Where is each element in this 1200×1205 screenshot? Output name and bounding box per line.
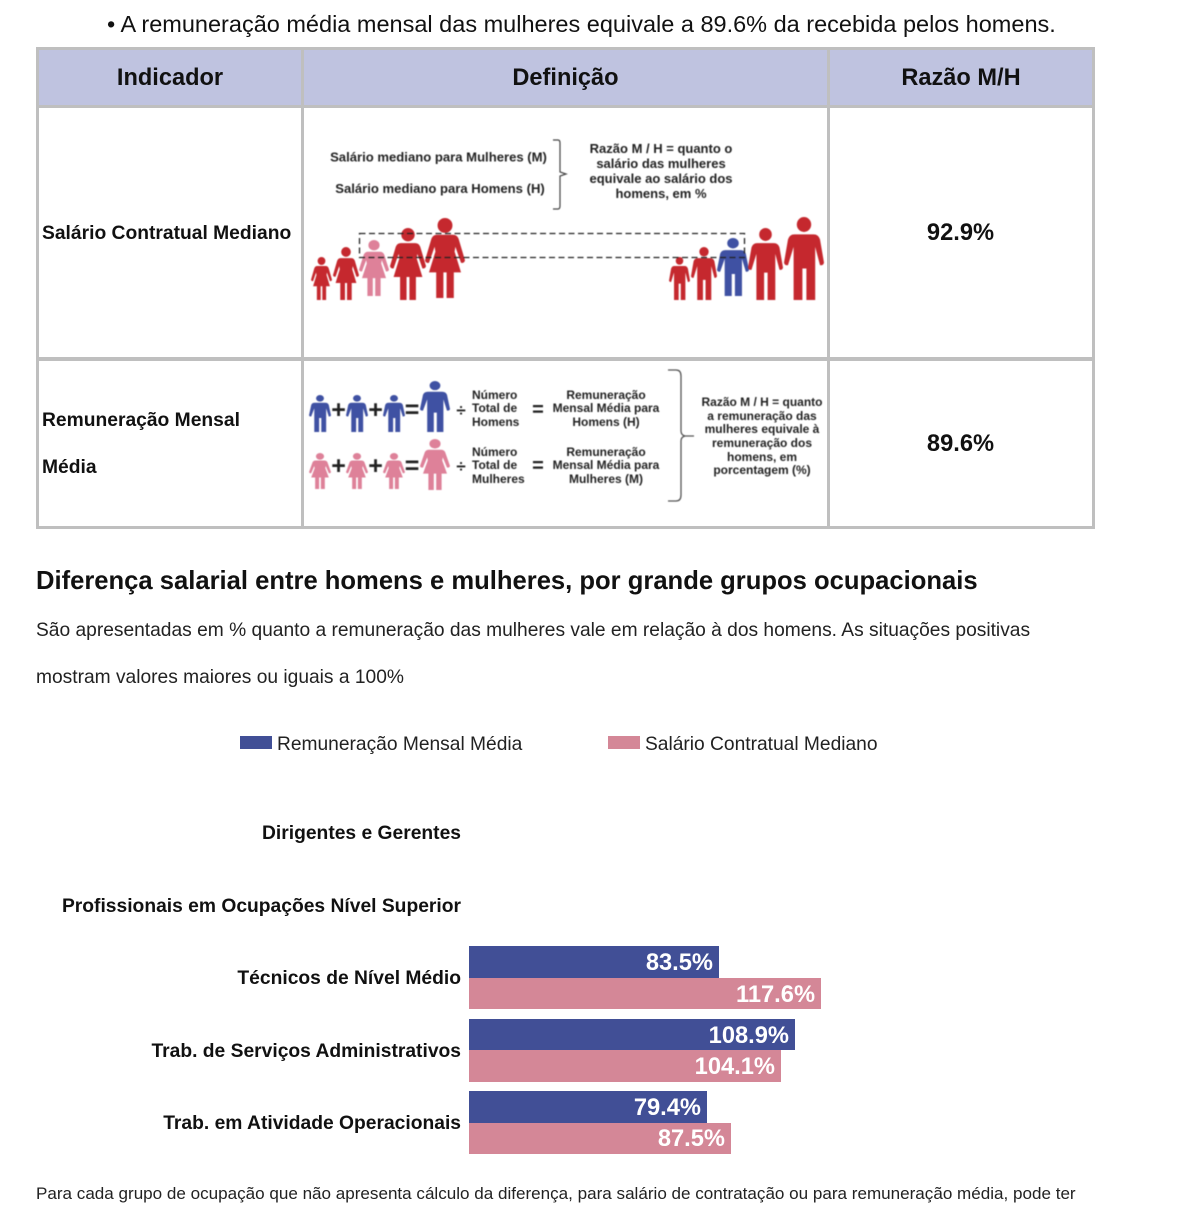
legend: remuneração mensal média: Remuneração Mensal Média xyxy=(277,734,522,755)
dashed comparison box xyxy=(360,234,744,258)
brace: remuneração xyxy=(668,370,694,501)
icon group: men sum xyxy=(309,381,450,432)
category: Operacionais: Trab. em Atividade Operacionais xyxy=(163,1113,461,1134)
icon group: five women xyxy=(311,218,465,300)
bar: administrativos remuneração: 108.9% xyxy=(709,1023,789,1049)
bar: administrativos remuneração xyxy=(469,1019,795,1050)
text: razão remuneração explanation: homens, em xyxy=(727,450,797,464)
row label: Salário Contratual Mediano xyxy=(39,108,301,357)
operators: men row xyxy=(331,396,544,424)
bar: técnicos remuneração xyxy=(469,946,719,978)
table header: Razão M/H xyxy=(830,50,1092,105)
category: Profissionais: Profissionais em Ocupações Nível Superior xyxy=(62,896,461,917)
operators: men row: + xyxy=(368,396,383,424)
text: razão remuneração explanation: porcentagem (%) xyxy=(713,463,811,477)
operators: women row: + xyxy=(368,452,383,480)
text: remuneração mulheres: Mensal Média para xyxy=(553,458,660,472)
text: razão salário explanation: homens, em % xyxy=(615,186,707,201)
text: razão remuneração explanation: mulheres equivale à xyxy=(705,422,820,436)
brace: salário xyxy=(553,140,566,209)
row label: Remuneração Mensal Média: Remuneração Mensal xyxy=(42,410,240,431)
operators: men row: = xyxy=(532,399,544,421)
bar: administrativos salário: 104.1% xyxy=(695,1054,775,1080)
text: remuneração homens xyxy=(553,388,660,429)
intro bullet text: • A remuneração média mensal das mulheres equivale a 89.6% da recebida pelos homens. xyxy=(107,11,1056,37)
operators: women row: + xyxy=(331,452,346,480)
text: remuneração homens: Homens (H) xyxy=(572,415,640,429)
text: razão salário explanation: Razão M / H = quanto o xyxy=(590,141,732,156)
value: 92.9%: 92.9% xyxy=(927,220,994,246)
category: Administrativos: Trab. de Serviços Administrativos xyxy=(151,1041,461,1062)
operators: men row: = xyxy=(405,396,419,424)
icon group: women sum xyxy=(309,439,450,490)
operators: women row: ÷ xyxy=(456,457,466,476)
operators: women row: = xyxy=(405,452,419,480)
table header: Definição xyxy=(304,50,827,105)
section description: mostram valores maiores ou iguais a 100% xyxy=(36,667,404,688)
definition cell: remuneração xyxy=(304,361,827,526)
text: número total de homens: Homens xyxy=(472,415,520,429)
text: número total de homens xyxy=(472,388,520,429)
diagrams xyxy=(308,138,825,502)
operators: men row: + xyxy=(331,396,346,424)
table header: Definição: Definição xyxy=(512,65,619,91)
text: remuneração mulheres xyxy=(553,445,660,486)
section description xyxy=(36,620,1030,688)
text: razão salário explanation: equivale ao salário dos xyxy=(589,171,733,186)
text: remuneração mulheres: Mulheres (M) xyxy=(569,472,643,486)
panel: indicator table xyxy=(36,47,1095,529)
text: razão salário explanation xyxy=(589,141,733,201)
text: remuneração homens: Mensal Média para xyxy=(553,401,660,415)
table header: Indicador xyxy=(39,50,301,105)
category: Dirigentes e Gerentes: Dirigentes e Gerentes xyxy=(262,823,461,844)
value: 92.9% xyxy=(830,108,1092,357)
section description: São apresentadas em % quanto a remuneração das mulheres vale em relação à dos homens. As situações positivas xyxy=(36,620,1030,641)
category: Técnicos: Técnicos de Nível Médio xyxy=(237,968,461,989)
value: 89.6% xyxy=(830,361,1092,526)
text: remuneração mulheres: Remuneração xyxy=(566,445,646,459)
bar: técnicos salário xyxy=(469,978,821,1009)
row label: Salário Contratual Mediano: Salário Contratual Mediano xyxy=(42,223,291,244)
text: salário mediano mulheres: Salário mediano para Mulheres (M) xyxy=(330,150,547,164)
text: número total de mulheres: Total de xyxy=(472,458,517,472)
bar: operacionais remuneração: 79.4% xyxy=(634,1095,701,1121)
text: remuneração homens: Remuneração xyxy=(566,388,646,402)
bar: operacionais remuneração xyxy=(469,1091,707,1123)
text: número total de mulheres: Mulheres xyxy=(472,472,525,486)
bar: técnicos remuneração: 83.5% xyxy=(646,950,713,976)
table header: Razão M/H: Razão M/H xyxy=(901,65,1021,91)
row label: Remuneração Mensal Média: Média xyxy=(42,456,97,478)
definition cell: salário xyxy=(304,108,827,357)
text: razão remuneração explanation: a remuneração das xyxy=(707,409,817,423)
text: número total de homens: Total de xyxy=(472,401,517,415)
text: número total de mulheres: Número xyxy=(472,445,517,459)
footnote: Para cada grupo de ocupação que não apresenta cálculo da diferença, para salário de contratação ou para remuneração média, pode ter xyxy=(36,1184,1076,1203)
bar chart xyxy=(62,823,821,1154)
text: razão remuneração explanation: remuneração dos xyxy=(712,436,812,450)
bar: operacionais salário xyxy=(469,1123,731,1154)
icon group: five men xyxy=(669,217,824,300)
text: razão remuneração explanation xyxy=(701,395,823,477)
table header: Indicador: Indicador xyxy=(117,65,223,91)
text: razão remuneração explanation: Razão M / H = quanto xyxy=(701,395,823,409)
legend: salário contratual mediano: Salário Contratual Mediano xyxy=(645,734,878,755)
text: número total de mulheres xyxy=(472,445,525,486)
text: número total de homens: Número xyxy=(472,388,517,402)
text: salário mediano homens: Salário mediano para Homens (H) xyxy=(335,181,545,196)
operators: women row xyxy=(331,452,544,480)
operators: men row: ÷ xyxy=(456,401,466,420)
bar: operacionais salário: 87.5% xyxy=(658,1126,725,1152)
text: razão salário explanation: salário das mulheres xyxy=(596,156,726,171)
bar: administrativos salário xyxy=(469,1050,781,1082)
operators: women row: = xyxy=(532,455,544,477)
section heading: Diferença salarial entre homens e mulheres, por grande grupos ocupacionais xyxy=(36,567,978,595)
bar: técnicos salário: 117.6% xyxy=(736,982,815,1008)
row label: Remuneração Mensal Média xyxy=(39,361,301,526)
value: 89.6%: 89.6% xyxy=(927,431,994,457)
